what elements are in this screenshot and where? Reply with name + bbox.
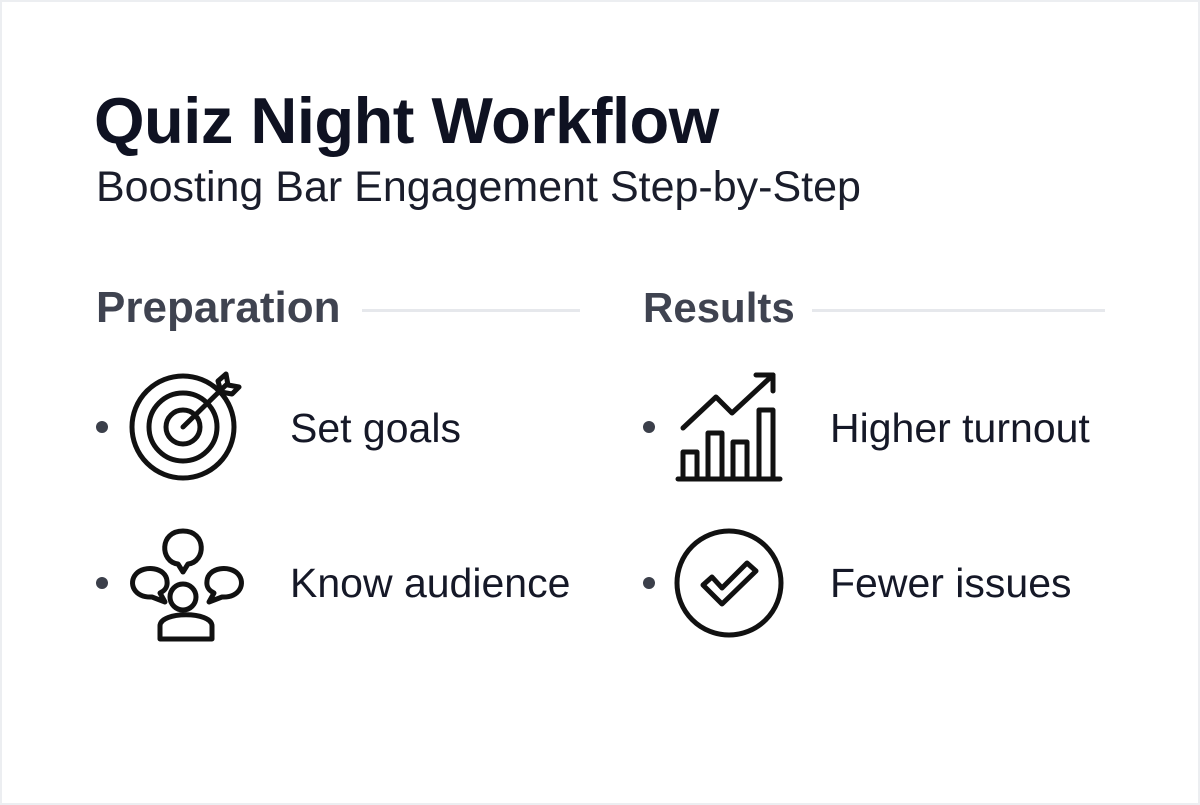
icon: bar chart	[676, 372, 782, 482]
text: Fewer issues	[830, 560, 1072, 606]
text: Set goals	[290, 405, 461, 451]
icon: target	[130, 372, 242, 480]
item: set goals	[96, 372, 461, 480]
item: higher turnout	[643, 372, 1090, 482]
text: Know audience	[290, 560, 570, 606]
subtitle: Boosting Bar Engagement Step-by-Step	[96, 163, 861, 211]
text: Higher turnout	[830, 405, 1090, 451]
heading: preparation: Preparation	[96, 283, 341, 332]
panel: preparation	[96, 283, 580, 642]
item: fewer issues	[643, 528, 1072, 638]
title: Quiz Night Workflow	[94, 84, 719, 157]
icon: check circle	[674, 528, 784, 638]
item: know audience	[96, 528, 570, 642]
icon: audience	[130, 528, 244, 642]
panel: results	[643, 284, 1105, 638]
heading: results: Results	[643, 284, 795, 331]
